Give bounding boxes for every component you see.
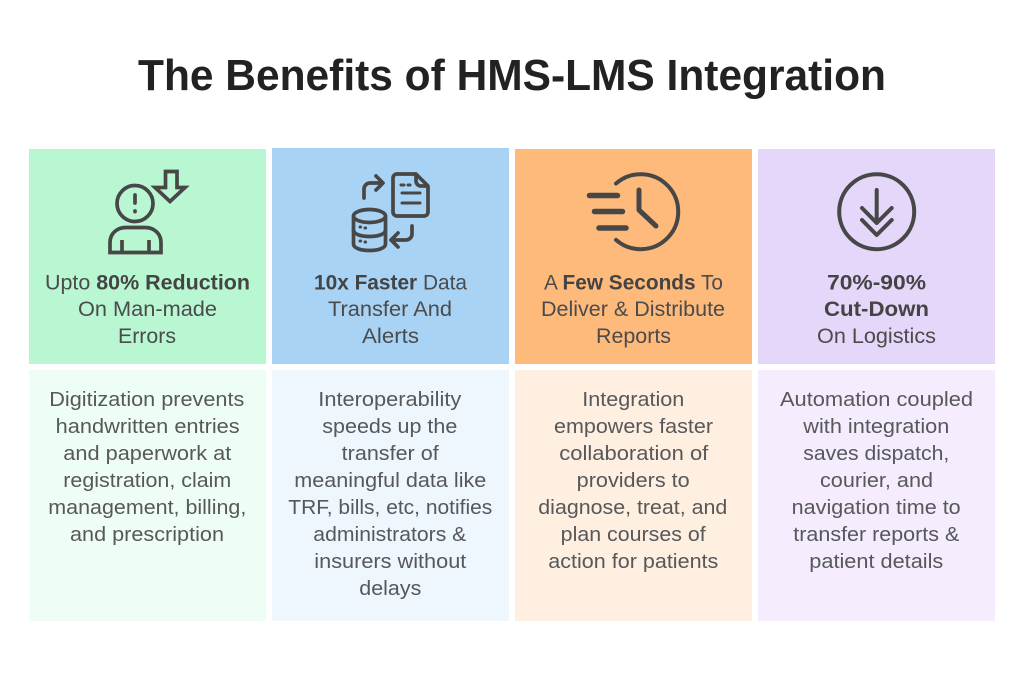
panel: report delivery time, description: [515, 370, 752, 621]
heading text: Errors: [118, 324, 176, 348]
panel: reduction in errors, header: [29, 149, 266, 364]
panel: faster data transfer, description: TRF, bills, etc, notifies: [288, 497, 492, 519]
panel: reduction in errors, description: and paperwork at: [63, 443, 232, 465]
panel: faster data transfer, header: [272, 148, 509, 364]
panel: faster data transfer, description: meaningful data like: [294, 470, 486, 492]
panel: faster data transfer, description: transfer of: [342, 443, 439, 465]
panel: report delivery time, description: providers to: [577, 470, 690, 492]
heading text: A Few Seconds To: [544, 270, 723, 294]
panel: logistics cut-down, description: [758, 370, 995, 621]
panel: faster data transfer, description: Interoperability: [318, 389, 461, 411]
panel: faster data transfer, description: speeds up the: [322, 416, 457, 438]
heading text: 70%-90%: [827, 270, 926, 294]
panel: logistics cut-down, description: transfer reports &: [793, 524, 960, 546]
panel: reduction in errors, description: Digitization prevents: [49, 389, 244, 411]
panel: logistics cut-down, description: courier, and: [820, 470, 933, 492]
panel: report delivery time, description: plan courses of: [561, 524, 706, 546]
panel: report delivery time, description: empowers faster: [554, 416, 713, 438]
panel: reduction in errors, description: and prescription: [70, 524, 224, 546]
panel: report delivery time, header: [515, 149, 752, 364]
panel: faster data transfer, description: insurers without: [314, 551, 467, 573]
heading text: [45, 270, 250, 348]
panel: faster data transfer, description: delays: [359, 578, 421, 600]
heading text: On Man-made: [78, 297, 217, 321]
icon: person with alert and down arrow: [110, 172, 185, 252]
heading text: [314, 270, 467, 348]
heading text: [541, 270, 725, 348]
panel: logistics cut-down, description: patient details: [809, 551, 943, 573]
panel: reduction in errors, description: registration, claim: [63, 470, 231, 492]
heading text: Upto 80% Reduction: [45, 270, 250, 294]
heading text: Deliver & Distribute: [541, 297, 725, 321]
heading text: 10x Faster Data: [314, 270, 467, 294]
heading text: [817, 270, 936, 348]
panel: faster data transfer, description: administrators &: [313, 524, 467, 546]
panel: report delivery time, description: action for patients: [548, 551, 718, 573]
panel: logistics cut-down, header: [758, 149, 995, 364]
panel: reduction in errors, description: [29, 370, 266, 621]
panel: logistics cut-down, description: navigation time to: [792, 497, 961, 519]
icon: database and document exchange: [354, 174, 428, 250]
panel: logistics cut-down, description: with integration: [802, 416, 949, 438]
panel: report delivery time, description: diagnose, treat, and: [538, 497, 727, 519]
heading text: Reports: [596, 324, 671, 348]
panel: report delivery time, description: Integration: [582, 389, 684, 411]
icon: fast clock: [590, 174, 678, 249]
heading text: On Logistics: [817, 324, 936, 348]
panel: report delivery time, description: collaboration of: [559, 443, 709, 465]
heading text: Cut-Down: [824, 297, 929, 321]
panel: logistics cut-down, description: saves dispatch,: [803, 443, 949, 465]
panel: faster data transfer, description: [272, 370, 509, 621]
icon: circled double down arrow: [839, 174, 914, 249]
title: The Benefits of HMS-LMS Integration: [138, 51, 886, 100]
panel: reduction in errors, description: management, billing,: [48, 497, 246, 519]
panel: reduction in errors, description: handwritten entries: [56, 416, 240, 438]
panel: logistics cut-down, description: Automation coupled: [780, 389, 973, 411]
heading text: Alerts: [362, 324, 419, 348]
heading text: Transfer And: [328, 297, 452, 321]
